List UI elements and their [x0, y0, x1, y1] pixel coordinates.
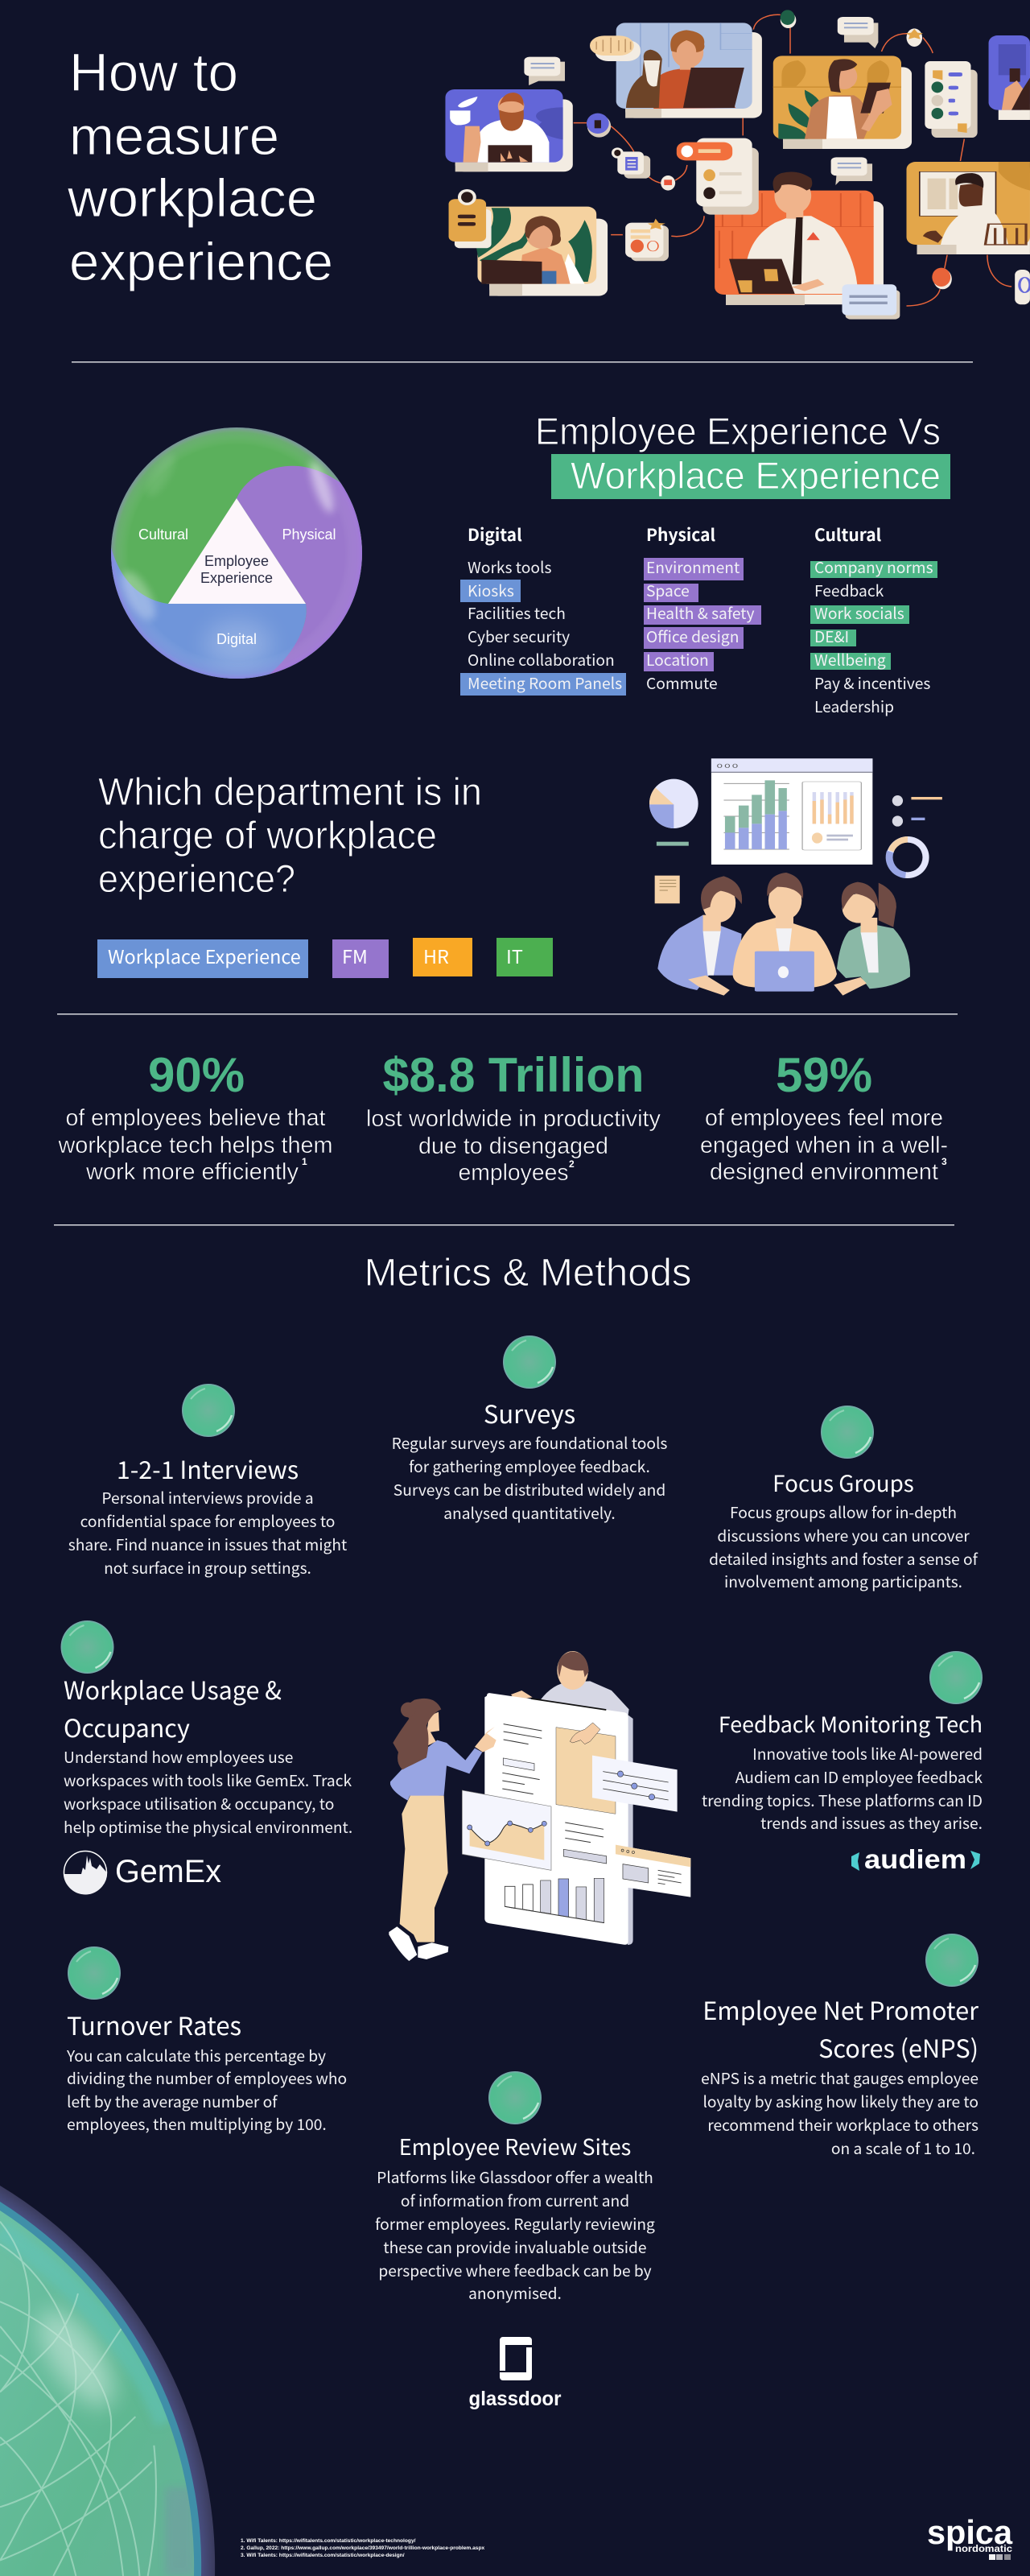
centre profile list — [677, 138, 759, 215]
method: surveys: analysed quantitatively. — [443, 1501, 616, 1524]
method: enps: recommend their workplace to others — [707, 2113, 978, 2136]
method: turnover rates: dividing the number of employees who — [67, 2066, 347, 2089]
method: focus groups: Focus Groups — [772, 1467, 914, 1499]
icon: bubble — [68, 1946, 121, 2000]
column: physical: Physical — [646, 522, 716, 547]
column: cultural: Pay & incentives — [814, 671, 930, 694]
column: digital: Online collaboration — [468, 648, 615, 671]
method: feedback monitoring tech: Audiem can ID employee feedback — [735, 1765, 983, 1788]
small list card — [612, 147, 675, 191]
logo: glassdoor — [468, 2337, 562, 2410]
stat: 90 percent: work more efficiently — [85, 1159, 299, 1185]
method: feedback monitoring tech: trends and issues as they arise. — [760, 1811, 983, 1834]
stat: 90 percent: of employees believe that — [66, 1105, 325, 1131]
method: surveys: for gathering employee feedback. — [409, 1455, 650, 1477]
method: enps: on a scale of 1 to 10. — [831, 2136, 975, 2159]
method: focus groups: involvement among participants. — [724, 1570, 962, 1592]
method: surveys: Surveys can be distributed widely and — [393, 1478, 665, 1501]
method: employee review sites: former employees. Regularly reviewing — [375, 2212, 655, 2235]
method: workplace usage — [61, 1620, 352, 1895]
method: enps: loyalty by asking how likely they are to — [702, 2090, 978, 2112]
legend and donut — [886, 795, 942, 878]
card: manager in orange — [715, 171, 884, 305]
triangle: employee experience — [168, 498, 306, 604]
method: turnover rates: You can calculate this percentage by — [66, 2044, 326, 2066]
column: digital: Meeting Room Panels — [468, 671, 622, 694]
stat: 59 percent: 3 — [941, 1156, 947, 1167]
method: turnover rates: Turnover Rates — [67, 2006, 241, 2042]
method: interviews: not surface in group settings. — [104, 1556, 311, 1579]
stat: 8.8 trillion: due to disengaged — [418, 1133, 608, 1159]
round connector icons — [587, 10, 1030, 304]
slider card — [592, 1756, 678, 1812]
icon: bubble — [503, 1335, 556, 1389]
method: workplace usage: Workplace Usage & — [64, 1671, 282, 1707]
method: employee review sites: perspective where feedback can be by — [378, 2259, 652, 2281]
small button card — [625, 219, 669, 261]
logo: spica nordomatic: nordomatic — [955, 2543, 1012, 2554]
method: focus groups: Focus groups allow for in-depth — [730, 1501, 957, 1523]
logo: gemex — [64, 1852, 221, 1895]
amber document — [449, 189, 492, 248]
stat: 90 percent: workplace tech helps them — [58, 1133, 332, 1158]
column: physical: Space — [646, 579, 690, 601]
method: interviews: share. Find nuance in issues that might — [68, 1533, 347, 1555]
column: cultural: Cultural — [814, 522, 882, 547]
stat: 90 percent — [58, 1048, 332, 1185]
method: turnover rates: left by the average number of — [67, 2090, 278, 2112]
method: interviews: confidential space for employees to — [80, 1509, 335, 1532]
logo: spica nordomatic: spica — [927, 2513, 1013, 2551]
card: checklist — [925, 61, 978, 138]
method: enps — [701, 1934, 978, 2159]
method: focus groups: detailed insights and foster a sense of — [709, 1547, 978, 1570]
panel: employee experience bubble diagram: Physical — [282, 526, 336, 543]
column: digital: Works tools — [468, 555, 551, 578]
illustration: team with dashboards — [649, 758, 942, 996]
column: digital: Digital — [468, 522, 522, 547]
speech bubbles — [524, 17, 900, 320]
column: cultural: Work socials — [814, 601, 904, 624]
stat: 90 percent: 1 — [302, 1156, 307, 1167]
icon: bubble — [821, 1406, 874, 1459]
title: How to — [69, 43, 238, 103]
method: employee review sites: Platforms like Glassdoor offer a wealth — [377, 2165, 653, 2188]
method: interviews: 1-2-1 Interviews — [117, 1451, 299, 1486]
method: turnover rates — [66, 1946, 347, 2135]
title: measure — [69, 106, 279, 167]
stat: 8.8 trillion: employees — [459, 1160, 568, 1186]
method: feedback monitoring tech: Innovative tools like AI-powered — [752, 1742, 983, 1765]
triangle: employee experience: Employee — [204, 553, 269, 569]
method: turnover rates: employees, then multiplying by 100. — [67, 2112, 327, 2135]
method: focus groups — [709, 1406, 978, 1592]
icon: bubble — [61, 1620, 114, 1674]
column: digital: Facilities tech — [468, 601, 566, 624]
method: employee review sites: of information from current and — [401, 2189, 629, 2211]
line chart card — [462, 1790, 551, 1870]
icon: bubble — [182, 1384, 235, 1437]
method: interviews: Personal interviews provide a — [101, 1486, 314, 1509]
stat: 59 percent — [700, 1048, 948, 1185]
method: enps: Employee Net Promoter — [702, 1991, 978, 2027]
heading: employee vs workplace experience — [535, 410, 950, 499]
column: digital: Cyber security — [468, 625, 570, 647]
column: cultural: Feedback — [814, 579, 884, 601]
card: purple coffee man — [445, 89, 573, 171]
dashboard window — [711, 758, 872, 865]
method: focus groups: discussions where you can uncover — [717, 1524, 970, 1546]
pie chart — [649, 779, 698, 828]
method: employee review sites: Employee Review Sites — [399, 2130, 631, 2161]
logo: glassdoor: glassdoor — [468, 2388, 562, 2410]
divider — [54, 1224, 954, 1225]
heading: which department: Which department is in — [98, 771, 482, 814]
method: interviews — [68, 1384, 347, 1579]
column: physical: Location — [646, 648, 709, 671]
heading: metrics and methods: Metrics & Methods — [364, 1252, 692, 1294]
method: workplace usage: Understand how employees use — [64, 1745, 293, 1768]
stat: 8.8 trillion — [366, 1048, 661, 1186]
big globe bubble — [0, 2186, 215, 2576]
person: centre — [733, 873, 837, 992]
heading: which department: charge of workplace — [98, 815, 437, 857]
department tags: Workplace Experience — [108, 942, 301, 969]
browser card — [616, 1845, 690, 1897]
department tags: IT — [506, 942, 523, 969]
panel: employee experience bubble diagram: Digital — [216, 631, 257, 647]
heading: which department — [98, 771, 482, 901]
card: man at monitor — [906, 162, 1030, 254]
method: workplace usage: workspaces with tools like GemEx. Track — [64, 1769, 352, 1791]
logo: gemex: GemEx — [115, 1854, 221, 1889]
board — [484, 1693, 633, 1945]
person: right — [834, 882, 910, 996]
method: employee review sites — [375, 2071, 655, 2410]
card: purple phone person — [989, 35, 1030, 120]
column: cultural — [810, 522, 937, 717]
method: workplace usage: help optimise the physical environment. — [64, 1815, 352, 1838]
note — [655, 876, 680, 903]
title — [67, 43, 333, 292]
column: physical: Office design — [646, 625, 739, 647]
method: surveys — [392, 1335, 667, 1524]
heading: employee vs workplace experience: Employee Experience Vs — [535, 410, 941, 452]
column: physical — [644, 522, 761, 694]
card: woman with laptop — [476, 207, 608, 296]
column: cultural: Wellbeing — [814, 648, 886, 671]
stat: 90 percent: 90% — [148, 1048, 245, 1102]
column: digital: Kiosks — [468, 579, 514, 601]
column: physical: Commute — [646, 671, 718, 694]
triangle: employee experience: Experience — [200, 570, 273, 586]
stat: 59 percent: 59% — [776, 1048, 872, 1102]
man hand — [570, 1723, 600, 1744]
footnotes: 1. Wifi Talents: https://wifitalents.com/statistic/workplace-technology/ — [241, 2538, 416, 2544]
column: cultural: DE&I — [814, 625, 849, 647]
icon: bubble — [925, 1934, 978, 1987]
method: workplace usage: workspace utilisation & occupancy, to — [64, 1792, 334, 1814]
panel: employee experience bubble diagram: Cultural — [138, 526, 188, 543]
woman pointing — [389, 1699, 496, 1961]
stat: 59 percent: designed environment — [710, 1159, 938, 1185]
title: workplace — [67, 168, 317, 229]
panel: employee experience bubble diagram — [111, 427, 362, 679]
column: cultural: Company norms — [814, 555, 933, 578]
heading: which department: experience? — [98, 858, 295, 901]
method: workplace usage: Occupancy — [64, 1709, 190, 1744]
method: feedback monitoring tech — [702, 1651, 983, 1874]
illustration: people and report board — [389, 1651, 690, 1961]
card: blue cat woman — [616, 23, 762, 118]
stat: 8.8 trillion: $8.8 Trillion — [383, 1048, 644, 1102]
method: employee review sites: these can provide invaluable outside — [383, 2235, 647, 2258]
column: physical: Environment — [646, 555, 740, 578]
logo: audiem: audiem — [864, 1844, 966, 1874]
method: surveys: Regular surveys are foundational tools — [392, 1431, 667, 1454]
method: feedback monitoring tech: trending topics. These platforms can ID — [702, 1789, 983, 1811]
stat: 8.8 trillion: 2 — [569, 1158, 575, 1170]
column: cultural: Leadership — [814, 695, 894, 717]
method: feedback monitoring tech: Feedback Monitoring Tech — [719, 1707, 983, 1739]
stat: 59 percent: engaged when in a well- — [700, 1133, 948, 1158]
person: left — [657, 876, 742, 996]
footnotes — [241, 2538, 484, 2558]
footnotes: 2. Gallup, 2022: https://www.gallup.com/workplace/393497/world-trillion-workplace-problem.aspx — [241, 2545, 484, 2551]
method: enps: eNPS is a metric that gauges employee — [701, 2066, 978, 2089]
card: amber tablet woman — [773, 56, 912, 149]
footnotes: 3. Wifi Talents: https://wifitalents.com/statistic/workplace-design/ — [241, 2553, 405, 2558]
man behind board — [511, 1651, 629, 1731]
method: employee review sites: anonymised. — [468, 2281, 562, 2304]
department tags — [97, 938, 553, 978]
department tags: HR — [423, 942, 449, 969]
method: surveys: Surveys — [484, 1394, 575, 1430]
column: physical: Health & safety — [646, 601, 755, 624]
divider — [72, 361, 973, 362]
icon: bubble — [488, 2071, 542, 2124]
heading: employee vs workplace experience: Workplace Experience — [571, 454, 941, 497]
stat: 59 percent: of employees feel more — [705, 1105, 943, 1131]
stat: 8.8 trillion: lost worldwide in productivity — [366, 1106, 661, 1132]
column: digital — [460, 522, 626, 696]
department tags: FM — [342, 942, 368, 969]
method: enps: Scores (eNPS) — [818, 2029, 978, 2065]
hero illustration: remote workers network — [445, 10, 1030, 320]
divider — [57, 1013, 958, 1014]
title: experience — [69, 232, 333, 292]
icon: bubble — [929, 1651, 983, 1704]
